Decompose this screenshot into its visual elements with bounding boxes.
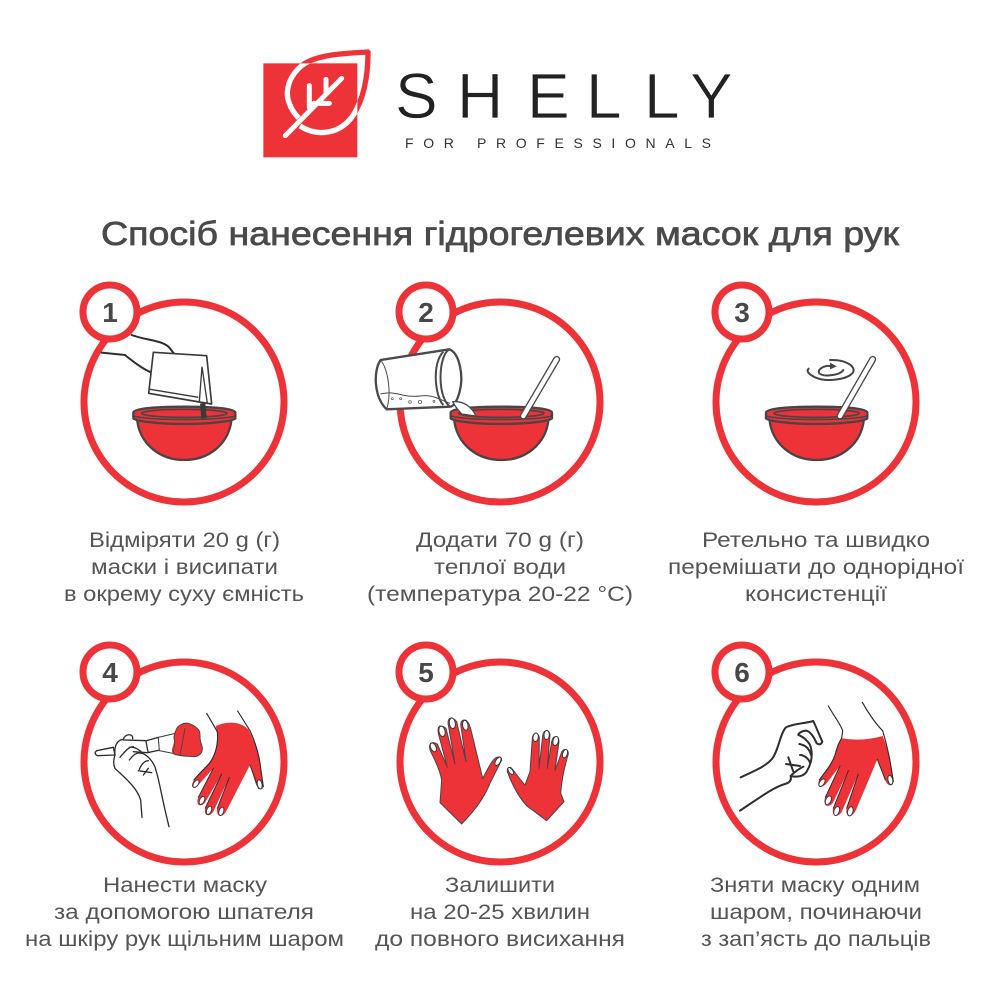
step 6 text: шаром, починаючи bbox=[710, 900, 922, 924]
step 4 text bbox=[25, 873, 344, 951]
step 4 ring bbox=[84, 662, 284, 862]
step 4 badge bbox=[83, 645, 137, 699]
step 3 badge bbox=[715, 285, 769, 339]
step 5 text: Залишити bbox=[445, 873, 555, 897]
title: Спосіб нанесення гідрогелевих масок для рук bbox=[101, 215, 900, 252]
step 6 number: 6 bbox=[734, 657, 750, 688]
step 3 illustration: stirring in bowl bbox=[766, 359, 873, 460]
step 2 text: Додати 70 g (г) bbox=[416, 528, 584, 552]
step 6 text: з зап’ясть до пальців bbox=[701, 927, 931, 951]
panel: step 4 bbox=[25, 645, 344, 951]
panel: step 3 bbox=[668, 285, 964, 606]
step 4 illustration: brush applying mask to hand bbox=[95, 711, 263, 827]
step 3 ring bbox=[716, 302, 916, 502]
step 1 text bbox=[64, 528, 304, 606]
panel: step 2 bbox=[367, 285, 633, 606]
step 6 text bbox=[701, 873, 931, 951]
step 1 number: 1 bbox=[102, 297, 118, 328]
step 4 text: Нанести маску bbox=[103, 873, 267, 897]
step 3 text bbox=[668, 528, 964, 606]
step 6 illustration: peeling mask from hand bbox=[740, 702, 894, 817]
step 2 illustration: glass pouring water into bowl bbox=[376, 349, 557, 460]
step 2 number: 2 bbox=[418, 297, 434, 328]
step 2 ring bbox=[400, 302, 600, 502]
panel: step 6 bbox=[701, 645, 931, 951]
step 2 text: теплої води bbox=[434, 555, 566, 579]
step 5 badge bbox=[399, 645, 453, 699]
step 6 badge bbox=[715, 645, 769, 699]
step 5 text: на 20-25 хвилин bbox=[410, 900, 590, 924]
step 1 text: Відміряти 20 g (г) bbox=[89, 528, 280, 552]
step 2 text bbox=[367, 528, 633, 606]
step 5 text bbox=[375, 873, 625, 951]
step 3 text: консистенції bbox=[745, 582, 887, 606]
step 6 text: Зняти маску одним bbox=[710, 873, 920, 897]
step 4 text: на шкіру рук щільним шаром bbox=[25, 927, 344, 951]
step 6 ring bbox=[716, 662, 916, 862]
step 2 badge bbox=[399, 285, 453, 339]
step 1 badge bbox=[83, 285, 137, 339]
step 4 number: 4 bbox=[102, 657, 118, 688]
step 5 ring bbox=[400, 662, 600, 862]
step 3 text: Ретельно та швидко bbox=[702, 528, 930, 552]
step 2 text: (температура 20-22 °C) bbox=[367, 582, 633, 606]
step 3 number: 3 bbox=[734, 297, 750, 328]
panel: step 5 bbox=[375, 645, 625, 951]
step 1 illustration: hand pouring sachet into bowl bbox=[102, 335, 235, 460]
logo tagline: FOR PROFESSIONALS bbox=[405, 135, 711, 151]
step 1 text: в окрему суху ємність bbox=[64, 582, 304, 606]
step 5 illustration: two hands with mask bbox=[429, 718, 569, 824]
step 1 text: маски і висипати bbox=[91, 555, 278, 579]
step 5 text: до повного висихання bbox=[375, 927, 625, 951]
logo wordmark: SHELLY bbox=[395, 60, 733, 132]
logo icon: leaf in red square bbox=[263, 52, 368, 157]
logo bbox=[263, 52, 733, 157]
step 5 number: 5 bbox=[418, 657, 434, 688]
step 1 ring bbox=[84, 302, 284, 502]
step 4 text: за допомогою шпателя bbox=[54, 900, 314, 924]
panel: step 1 bbox=[64, 285, 304, 606]
step 3 text: перемішати до однорідної bbox=[668, 555, 964, 579]
